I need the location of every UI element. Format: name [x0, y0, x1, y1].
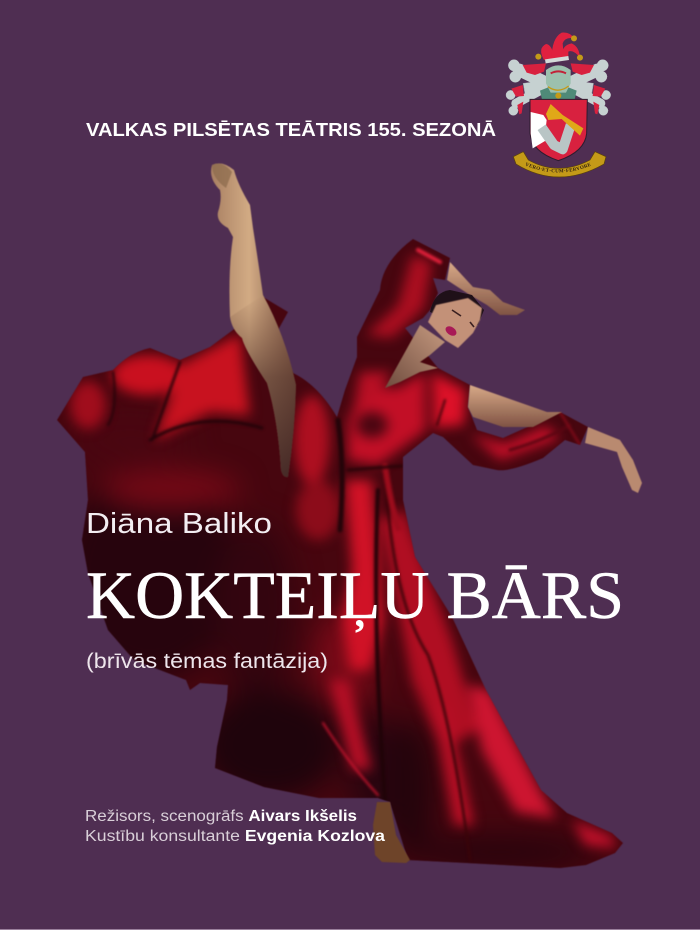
face: [428, 298, 482, 348]
bones mantling: [506, 60, 611, 115]
hair: [430, 290, 484, 325]
chest and neck: [385, 325, 445, 388]
play title: KOKTEIĻU BĀRS: [86, 557, 624, 633]
red dress: [40, 230, 640, 880]
dancer figure: [40, 163, 642, 880]
movement consultant credit: Kustību konsultante Evgenia Kozlova: [85, 828, 385, 845]
shield: [530, 99, 587, 161]
coat of arms: [506, 32, 611, 178]
theatre heading: VALKAS PILSĒTAS TEĀTRIS 155. SEZONĀ: [86, 120, 496, 140]
bottom edge: [0, 929, 700, 930]
red drapes: [511, 63, 605, 114]
extended forearm and hand: [585, 427, 642, 493]
helmet: [540, 65, 577, 99]
subtitle: (brīvās tēmas fantāzija): [86, 650, 328, 673]
motto ribbon: [513, 151, 606, 178]
director credit: Režisors, scenogrāfs Aivars Ikšelis: [85, 808, 357, 825]
raised leg: [211, 163, 296, 477]
upper arm: [468, 385, 562, 427]
eyes: [452, 310, 474, 327]
raised forearm and hand: [447, 262, 525, 315]
author: Diāna Baliko: [86, 508, 272, 540]
jester hat: [535, 33, 583, 63]
standing foot: [373, 802, 410, 863]
motto text: VERO·ET·CUM·FERVORE: [526, 162, 591, 172]
lips: [444, 324, 458, 338]
